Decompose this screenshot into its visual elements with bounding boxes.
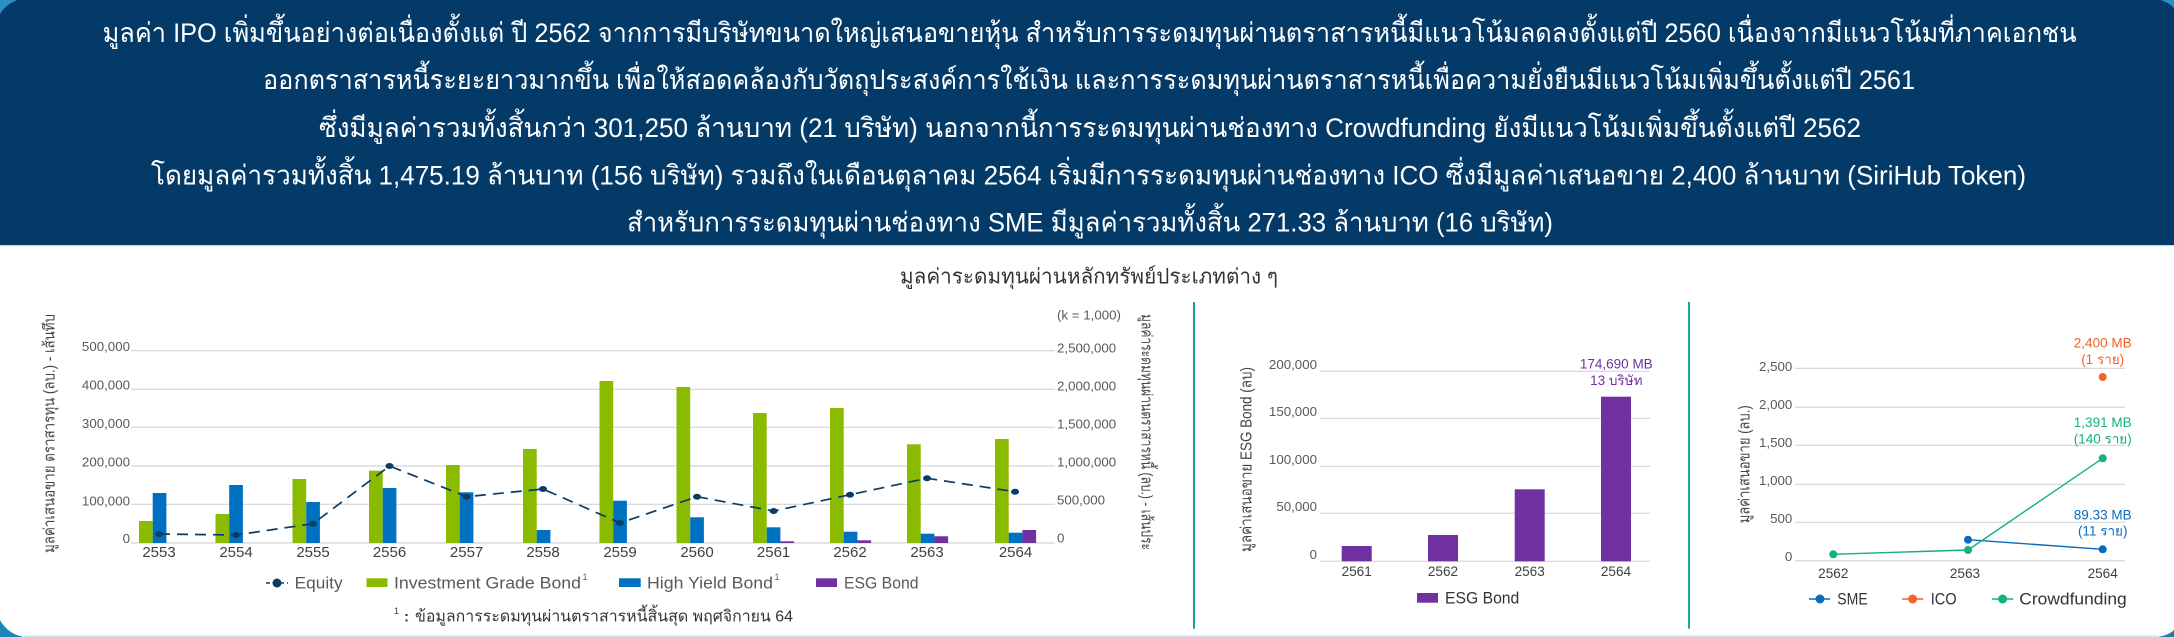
- left axis title: มูลค่าเสนอขาย ตราสารทุน (ลบ.) - เส้นทึบ: [42, 314, 60, 553]
- axis title: มูลค่าเสนอขาย ESG Bond (ลบ): [1238, 367, 1256, 552]
- left axis labels: 200,000: [82, 454, 130, 470]
- gridlines: [1795, 368, 2125, 561]
- right axis labels: 1,000,000: [1057, 454, 1116, 470]
- banner: summary text: [0, 0, 2174, 246]
- data labels: (140 ราย): [2074, 432, 2132, 446]
- data labels: 89.33 MB: [2074, 508, 2132, 522]
- left axis labels: 100,000: [82, 494, 130, 508]
- legend: SME: [1837, 590, 1868, 608]
- legend: [266, 572, 918, 592]
- axis labels: 2,500: [1759, 359, 1792, 374]
- year labels: 2562: [1428, 564, 1458, 579]
- year labels: 2564: [999, 544, 1032, 561]
- year labels: 2563: [1950, 566, 1980, 581]
- blue bars: High Yield Bond: [153, 485, 1022, 543]
- right axis title: มูลค่าระดมทุนผ่านตราสารหนี้ (ลบ.) - เส้นประ: [1136, 314, 1158, 550]
- legend: Crowdfunding: [2019, 590, 2127, 608]
- divider: left: [1193, 302, 1195, 629]
- dashed line: Equity: [155, 463, 1019, 538]
- left axis labels: 300,000: [82, 416, 130, 431]
- year labels: 2556: [373, 544, 406, 561]
- axis labels: 0: [1785, 549, 1792, 564]
- data labels: (1 ราย): [2081, 352, 2124, 367]
- year labels: 2555: [296, 544, 330, 561]
- gridlines: [1320, 371, 1650, 561]
- divider: right: [1688, 302, 1690, 629]
- green bars: Investment Grade Bond: [139, 381, 1009, 543]
- legend: High Yield Bond: [647, 574, 773, 592]
- year labels: [142, 544, 1032, 561]
- panel: ESG bond bar chart: [1238, 356, 1653, 608]
- year labels: 2562: [1818, 566, 1848, 581]
- axis labels: 150,000: [1269, 404, 1317, 419]
- banner: summary text: ออกตราสารหนี้ระยะยาวมากขึ้น เพื่อให้สอดคล้องกับวัตถุประสงค์การใช้เงิน และการระดมทุนผ่านตราสารหนี้เพื่อความยั่งยืนมีแนวโน้มเพิ่มขึ้นตั้งแต่ปี 2561: [263, 60, 1915, 97]
- legend: 1: [774, 572, 780, 582]
- year labels: 2559: [603, 544, 637, 561]
- year labels: 2562: [833, 544, 867, 561]
- data labels: 2,400 MB: [2074, 336, 2132, 350]
- SME series: [1964, 536, 2107, 553]
- year labels: 2564: [1601, 564, 1632, 579]
- year labels: 2557: [450, 544, 483, 561]
- legend: 1: [582, 572, 588, 582]
- year labels: 2561: [757, 544, 790, 561]
- axis labels: 200,000: [1269, 357, 1317, 372]
- axis labels: 100,000: [1269, 452, 1317, 467]
- panel: SME ICO Crowdfunding line chart: [1736, 336, 2132, 608]
- left axis labels: [82, 339, 130, 546]
- year labels: 2563: [910, 544, 944, 561]
- right axis labels: [1057, 308, 1121, 546]
- axis labels: [1269, 357, 1317, 562]
- axis labels: [1759, 359, 1792, 564]
- axis labels: 2,000: [1759, 397, 1792, 412]
- legend: ESG Bond: [1445, 588, 1519, 608]
- right axis labels: 0: [1057, 530, 1064, 546]
- heading: fundraising value by security type: มูลค่าระดมทุนผ่านหลักทรัพย์ประเภทต่าง ๆ: [900, 264, 1278, 290]
- axis labels: 1,500: [1759, 435, 1792, 450]
- left axis labels: 500,000: [82, 339, 130, 354]
- year labels: 2563: [1515, 564, 1545, 579]
- legend: ICO: [1931, 590, 1957, 608]
- right axis labels: (k = 1,000): [1057, 308, 1121, 322]
- right axis labels: 2,500,000: [1057, 340, 1116, 356]
- footnote: ข้อมูลการระดมทุนผ่านตราสารหนี้สิ้นสุด พฤศจิกายน 64: [415, 604, 793, 626]
- year labels: 2553: [142, 544, 176, 561]
- legend: ESG Bond: [844, 574, 918, 592]
- left axis labels: 400,000: [82, 378, 130, 392]
- right axis labels: 500,000: [1057, 492, 1105, 508]
- legend: Equity: [295, 574, 343, 592]
- year labels: 2558: [526, 544, 560, 561]
- axis labels: 500: [1770, 511, 1792, 526]
- year labels: 2561: [1342, 564, 1372, 579]
- legend: [1809, 590, 2127, 608]
- axis labels: 1,000: [1759, 473, 1792, 488]
- data labels: 1,391 MB: [2074, 415, 2132, 430]
- banner: summary text: โดยมูลค่ารวมทั้งสิ้น 1,475.19 ล้านบาท (156 บริษัท) รวมถึงในเดือนตุลาคม 2564 เริ่มมีการระดมทุนผ่านช่องทาง ICO ซึ่งมีมูลค่าเสนอขาย 2,400 ล้านบาท (SiriHub Token): [151, 156, 2026, 192]
- axis labels: 50,000: [1276, 499, 1317, 514]
- bars: [1342, 397, 1631, 561]
- data label: [1580, 356, 1653, 388]
- axis title: มูลค่าเสนอขาย (ลบ.): [1736, 405, 1754, 523]
- banner: summary text: ซึ่งมีมูลค่ารวมทั้งสิ้นกว่า 301,250 ล้านบาท (21 บริษัท) นอกจากนี้การระดมทุนผ่านช่องทาง Crowdfunding ยังมีแนวโน้มเพิ่มขึ้นตั้งแต่ปี 2562: [319, 108, 1861, 145]
- year labels: 2564: [2088, 566, 2118, 581]
- legend: [1417, 588, 1519, 608]
- data labels: [2074, 336, 2132, 538]
- left axis labels: 0: [123, 531, 130, 546]
- footnote: 1: [394, 606, 399, 616]
- axis labels: 0: [1310, 547, 1317, 562]
- year labels: [1818, 566, 2118, 581]
- banner: summary text: มูลค่า IPO เพิ่มขึ้นอย่างต่อเนื่องตั้งแต่ ปี 2562 จากการมีบริษัทขนาดใหญ่เสนอขายหุ้น สำหรับการระดมทุนผ่านตราสารหนี้มีแนวโน้มลดลงตั้งแต่ปี 2560 เนื่องจากมีแนวโน้มที่ภาคเอกชน: [103, 13, 2077, 50]
- data labels: (11 ราย): [2078, 524, 2127, 538]
- ICO point: [2099, 373, 2107, 381]
- year labels: 2554: [219, 544, 253, 561]
- right axis labels: 1,500,000: [1057, 416, 1116, 432]
- purple bars: ESG Bond: [780, 530, 1036, 543]
- panel: equity and bond combo chart: [42, 308, 1158, 626]
- gridlines: [131, 351, 1055, 543]
- data label: 13 บริษัท: [1590, 373, 1642, 388]
- year labels: 2560: [680, 544, 714, 561]
- data label: 174,690 MB: [1580, 356, 1653, 372]
- legend: Investment Grade Bond: [394, 574, 581, 592]
- right axis labels: 2,000,000: [1057, 378, 1116, 394]
- footnote: :: [404, 608, 409, 626]
- banner: summary text: สำหรับการระดมทุนผ่านช่องทาง SME มีมูลค่ารวมทั้งสิ้น 271.33 ล้านบาท (16 บริษัท): [627, 202, 1553, 240]
- year labels: [1342, 564, 1632, 579]
- Crowdfunding series: [1829, 454, 2107, 558]
